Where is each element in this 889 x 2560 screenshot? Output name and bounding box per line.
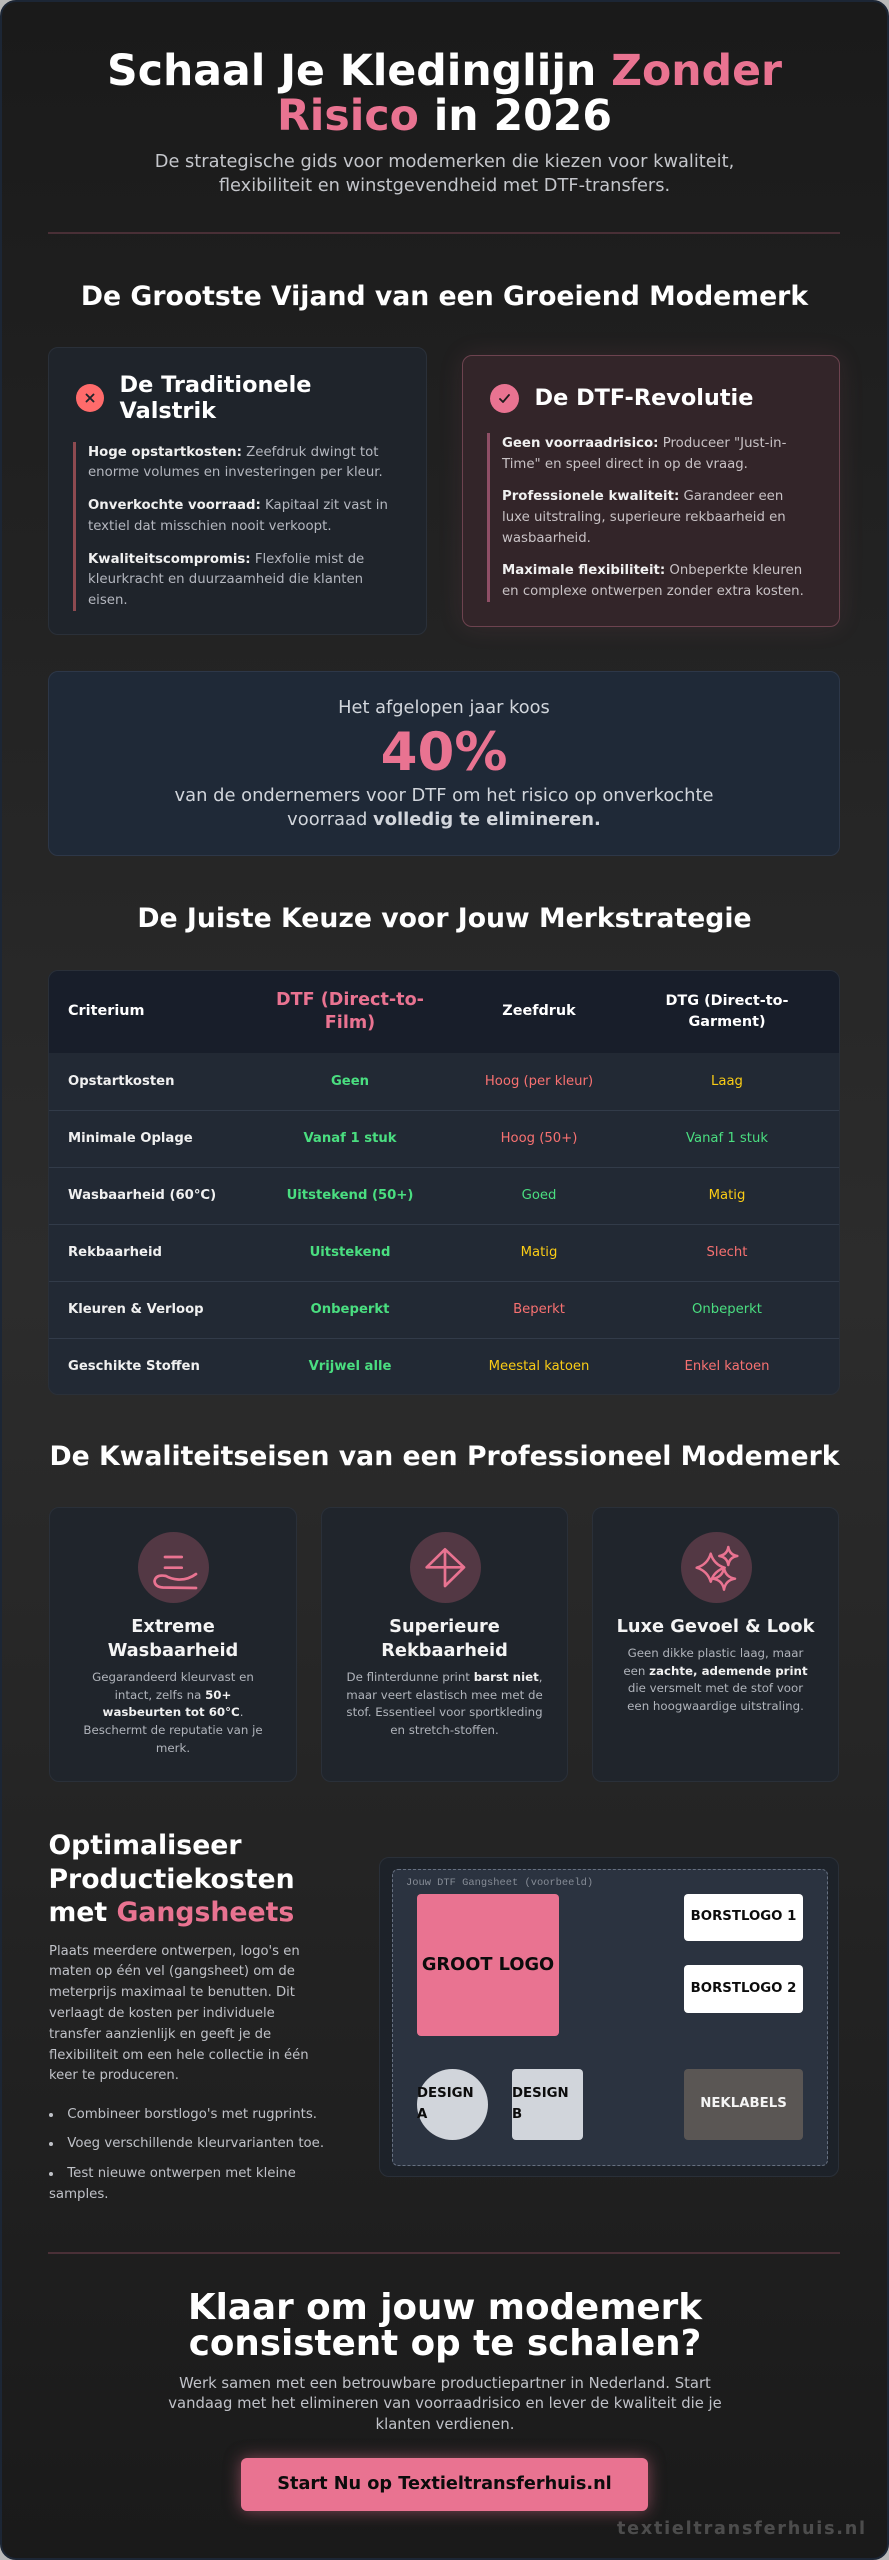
text block: voorraadrisico: Time" en speel direct in op de vraag. — [502, 457, 748, 472]
row: opstartkosten: Opstartkosten — [68, 1074, 174, 1089]
feature description: intact, zelfs na 50+ — [115, 1688, 231, 1702]
feature description: een zachte, ademende print — [623, 1664, 808, 1678]
heading: kwaliteitseisen: De Kwaliteitseisen van een Professioneel Modemerk — [49, 1441, 840, 1472]
design a: A — [417, 2106, 427, 2122]
title: Risico in 2026 — [277, 91, 612, 141]
comparison table — [48, 970, 840, 1395]
row: minimale oplage: Vanaf 1 stuk — [303, 1131, 397, 1146]
panel: luxe gevoel — [592, 1507, 839, 1782]
row: kleuren en verloop: Kleuren & Verloop — [68, 1302, 204, 1317]
text block: kwaliteit: Kwaliteitscompromis: Flexfolie mist de — [88, 552, 364, 567]
text block: kwaliteit: wasbaarheid. — [502, 531, 591, 546]
text block: call to action: vandaag met het elimineren van voorraadrisico en lever de kwaliteit die je — [168, 2395, 722, 2412]
title — [107, 46, 782, 141]
feature description: Geen dikke plastic laag, maar — [628, 1646, 803, 1660]
row: wasbaarheid — [48, 1167, 840, 1224]
icon: check — [490, 384, 519, 413]
text block: flexibiliteit: Maximale flexibiliteit: Onbeperkte kleuren — [502, 563, 802, 578]
design: borstlogo 1 — [684, 1894, 803, 1941]
table header row: DTF (Direct-to- — [276, 990, 424, 1010]
feature description: stof. Essentieel voor sportkleding — [346, 1705, 543, 1719]
heading: gangsheets: Productiekosten — [48, 1864, 295, 1894]
text block: gangsheet uitleg: keer te produceren. — [49, 2068, 179, 2083]
feature title: Extreme — [131, 1616, 215, 1637]
stat intro: Het afgelopen jaar koos — [338, 697, 550, 718]
feature title — [108, 1616, 238, 1661]
sheet label: Jouw DTF Gangsheet (voorbeeld) — [406, 1877, 593, 1889]
feature title: Superieure — [389, 1616, 500, 1637]
text block: voorraad: textiel dat misschien nooit verkoopt. — [88, 519, 332, 534]
text block: gangsheet uitleg: verlaagt de kosten per individuele — [49, 2006, 275, 2021]
accent bar — [73, 442, 76, 611]
icon: wash — [138, 1532, 209, 1603]
text block: voorraadrisico — [502, 436, 786, 472]
text block: gangsheet uitleg — [49, 1944, 309, 2083]
text block: voorraadrisico: Geen voorraadrisico: Produceer "Just-in- — [502, 436, 786, 451]
table header row: Criterium — [68, 1003, 144, 1019]
title: Schaal Je Kledinglijn Zonder — [107, 46, 782, 96]
design b: DESIGN — [512, 2086, 569, 2101]
text block: gangsheet uitleg: flexibiliteit om een hele collectie in één — [49, 2048, 309, 2063]
stat value: 40% — [381, 722, 507, 783]
stat description: van de ondernemers voor DTF om het risico op onverkochte — [175, 785, 713, 806]
subtitle — [155, 151, 734, 196]
text block: gangsheet uitleg: meterprijs maximaal te benutten. Dit — [49, 1985, 295, 2000]
text block: voorraad — [88, 498, 388, 534]
table header row: DTG (Direct-to- — [665, 993, 789, 1009]
row: wasbaarheid: Matig — [709, 1188, 745, 1203]
row: kleuren en verloop: Beperkt — [513, 1302, 565, 1317]
row: opstartkosten: Hoog (per kleur) — [485, 1074, 593, 1089]
feature description: De flinterdunne print barst niet, — [346, 1670, 543, 1684]
row: minimale oplage: Hoog (50+) — [501, 1131, 577, 1146]
design: borstlogo 1: BORSTLOGO 1 — [691, 1909, 796, 1924]
list: gangsheet tips: Combineer borstlogo's met rugprints. — [67, 2107, 317, 2122]
row: minimale oplage — [48, 1110, 840, 1167]
row: geschikte stoffen: Enkel katoen — [684, 1359, 770, 1374]
text block: call to action: Werk samen met een betrouwbare productiepartner in Nederland. Start — [179, 2375, 711, 2392]
text block: flexibiliteit: en complexe ontwerpen zonder extra kosten. — [502, 584, 804, 599]
design: neklabels: NEKLABELS — [700, 2096, 787, 2111]
icon: cross — [76, 384, 104, 412]
feature description: wasbeurten tot 60°C. — [103, 1705, 243, 1719]
feature description — [346, 1670, 543, 1737]
row: minimale oplage: Vanaf 1 stuk — [686, 1131, 768, 1146]
row: geschikte stoffen: Vrijwel alle — [309, 1359, 391, 1374]
row: opstartkosten — [48, 1053, 840, 1110]
panel: superieure rekbaarheid — [321, 1507, 568, 1782]
design: groot logo — [417, 1894, 559, 2036]
table header row: Film) — [325, 1012, 375, 1032]
feature title: Wasbaarheid — [108, 1640, 238, 1661]
feature description: Gegarandeerd kleurvast en — [92, 1670, 254, 1684]
text block: bezwaren: Hoge opstartkosten: Zeefdruk dwingt tot — [88, 445, 378, 460]
text block: gangsheet uitleg: Plaats meerdere ontwerpen, logo's en — [49, 1944, 300, 1959]
panel: traditionele valstrik — [48, 347, 427, 635]
feature description: maar veert elastisch mee met de — [346, 1688, 543, 1702]
heading: gangsheets: Optimaliseer — [48, 1830, 242, 1861]
row: kleuren en verloop: Onbeperkt — [692, 1302, 762, 1317]
row: rekbaarheid: Rekbaarheid — [68, 1245, 162, 1260]
heading: de traditionele valstrik: Valstrik — [120, 398, 216, 424]
list: gangsheet tips — [49, 2107, 324, 2202]
feature description: merk. — [156, 1741, 190, 1755]
text block: kwaliteit: eisen. — [88, 593, 128, 608]
text block: bezwaren — [88, 445, 383, 480]
feature title: Luxe Gevoel & Look — [617, 1616, 814, 1637]
row: wasbaarheid: Goed — [522, 1188, 556, 1203]
panel: statistiek 40% — [48, 671, 840, 856]
text block: kwaliteit: Professionele kwaliteit: Garandeer een — [502, 489, 783, 504]
design: groot logo: GROOT LOGO — [422, 1954, 554, 1975]
text block: kwaliteit — [502, 489, 786, 546]
design: neklabels — [684, 2069, 803, 2140]
text block: call to action — [168, 2375, 722, 2433]
text block: kwaliteit: kleurkracht en duurzaamheid die klanten — [88, 572, 363, 587]
table header row: Garment) — [688, 1014, 766, 1030]
watermark: textieltransferhuis.nl — [617, 2519, 867, 2539]
row: wasbaarheid: Uitstekend (50+) — [287, 1188, 413, 1203]
heading: grootste vijand: De Grootste Vijand van een Groeiend Modemerk — [81, 281, 808, 312]
row: rekbaarheid: Slecht — [707, 1245, 747, 1260]
list: gangsheet tips: Voeg verschillende kleurvarianten toe. — [67, 2136, 324, 2151]
feature description: een hoogwaardige uitstraling. — [627, 1699, 804, 1713]
feature description: en stretch-stoffen. — [390, 1723, 499, 1737]
panel: dtf-revolutie — [462, 355, 840, 627]
feature title: Rekbaarheid — [381, 1640, 508, 1661]
feature description — [623, 1646, 808, 1713]
icon: sparkles — [681, 1532, 752, 1603]
table header row — [48, 970, 840, 1053]
feature description: die versmelt met de stof voor — [628, 1681, 803, 1695]
subtitle: flexibiliteit en winstgevendheid met DTF-transfers. — [219, 175, 670, 196]
text block: gangsheet uitleg: maten op één vel (gangsheet) om de — [49, 1964, 295, 1979]
feature description: Beschermt de reputatie van je — [83, 1723, 263, 1737]
design b — [512, 2069, 583, 2140]
feature description — [83, 1670, 263, 1755]
design a — [417, 2069, 488, 2140]
row: kleuren en verloop: Onbeperkt — [311, 1302, 389, 1317]
row: kleuren en verloop — [48, 1281, 840, 1338]
heading: call to action: consistent op te schalen? — [189, 2322, 701, 2364]
row: geschikte stoffen — [48, 1338, 840, 1395]
design: borstlogo 2: BORSTLOGO 2 — [691, 1981, 796, 1996]
design: borstlogo 2 — [684, 1965, 803, 2013]
row: geschikte stoffen: Meestal katoen — [489, 1359, 589, 1374]
button: start nu: Start Nu op Textieltransferhuis.nl — [277, 2474, 612, 2494]
text block: gangsheet uitleg: transfer aanzienlijk en geeft je de — [49, 2027, 271, 2042]
table header row: Zeefdruk — [502, 1003, 576, 1019]
panel: gangsheet voorbeeld — [379, 1857, 839, 2177]
stat description — [175, 785, 713, 830]
design b: B — [512, 2106, 522, 2122]
text block: bezwaren: enorme volumes en investeringen per kleur. — [88, 465, 383, 480]
row: opstartkosten: Geen — [331, 1074, 369, 1089]
text block: flexibiliteit — [502, 563, 804, 599]
row: geschikte stoffen: Geschikte Stoffen — [68, 1359, 200, 1374]
gangsheet sheet — [392, 1869, 828, 2166]
design a: DESIGN — [417, 2086, 474, 2101]
feature title — [381, 1616, 508, 1661]
row: rekbaarheid — [48, 1224, 840, 1281]
text block: voorraad: Onverkochte voorraad: Kapitaal zit vast in — [88, 498, 388, 513]
heading: call to action: Klaar om jouw modemerk — [188, 2287, 702, 2328]
heading: de traditionele valstrik — [120, 372, 311, 424]
row: opstartkosten: Laag — [711, 1074, 743, 1089]
heading: gangsheets — [48, 1830, 295, 1928]
heading: gangsheets: met Gangsheets — [48, 1897, 294, 1928]
heading: call to action — [188, 2287, 703, 2364]
row: rekbaarheid: Matig — [521, 1245, 557, 1260]
text block: kwaliteit: luxe uitstraling, superieure rekbaarheid en — [502, 510, 786, 525]
button: start nu — [241, 2458, 648, 2511]
heading: de dtf-revolutie: De DTF-Revolutie — [534, 384, 753, 410]
text block: call to action: klanten verdienen. — [376, 2416, 514, 2433]
heading: juiste keuze: De Juiste Keuze voor Jouw Merkstrategie — [137, 903, 752, 934]
row: minimale oplage: Minimale Oplage — [68, 1131, 193, 1146]
icon: stretch — [410, 1532, 481, 1603]
text block: kwaliteit — [88, 552, 364, 608]
row: rekbaarheid: Uitstekend — [310, 1245, 390, 1260]
list: gangsheet tips: Test nieuwe ontwerpen met kleine samples. — [49, 2166, 296, 2202]
stat description: voorraad volledig te elimineren. — [287, 809, 601, 830]
row: wasbaarheid: Wasbaarheid (60°C) — [68, 1188, 216, 1203]
panel: extreme wasbaarheid — [49, 1507, 297, 1782]
subtitle: De strategische gids voor modemerken die kiezen voor kwaliteit, — [155, 151, 734, 172]
heading: de traditionele valstrik: De Traditionele — [120, 372, 311, 398]
accent bar — [487, 433, 490, 602]
